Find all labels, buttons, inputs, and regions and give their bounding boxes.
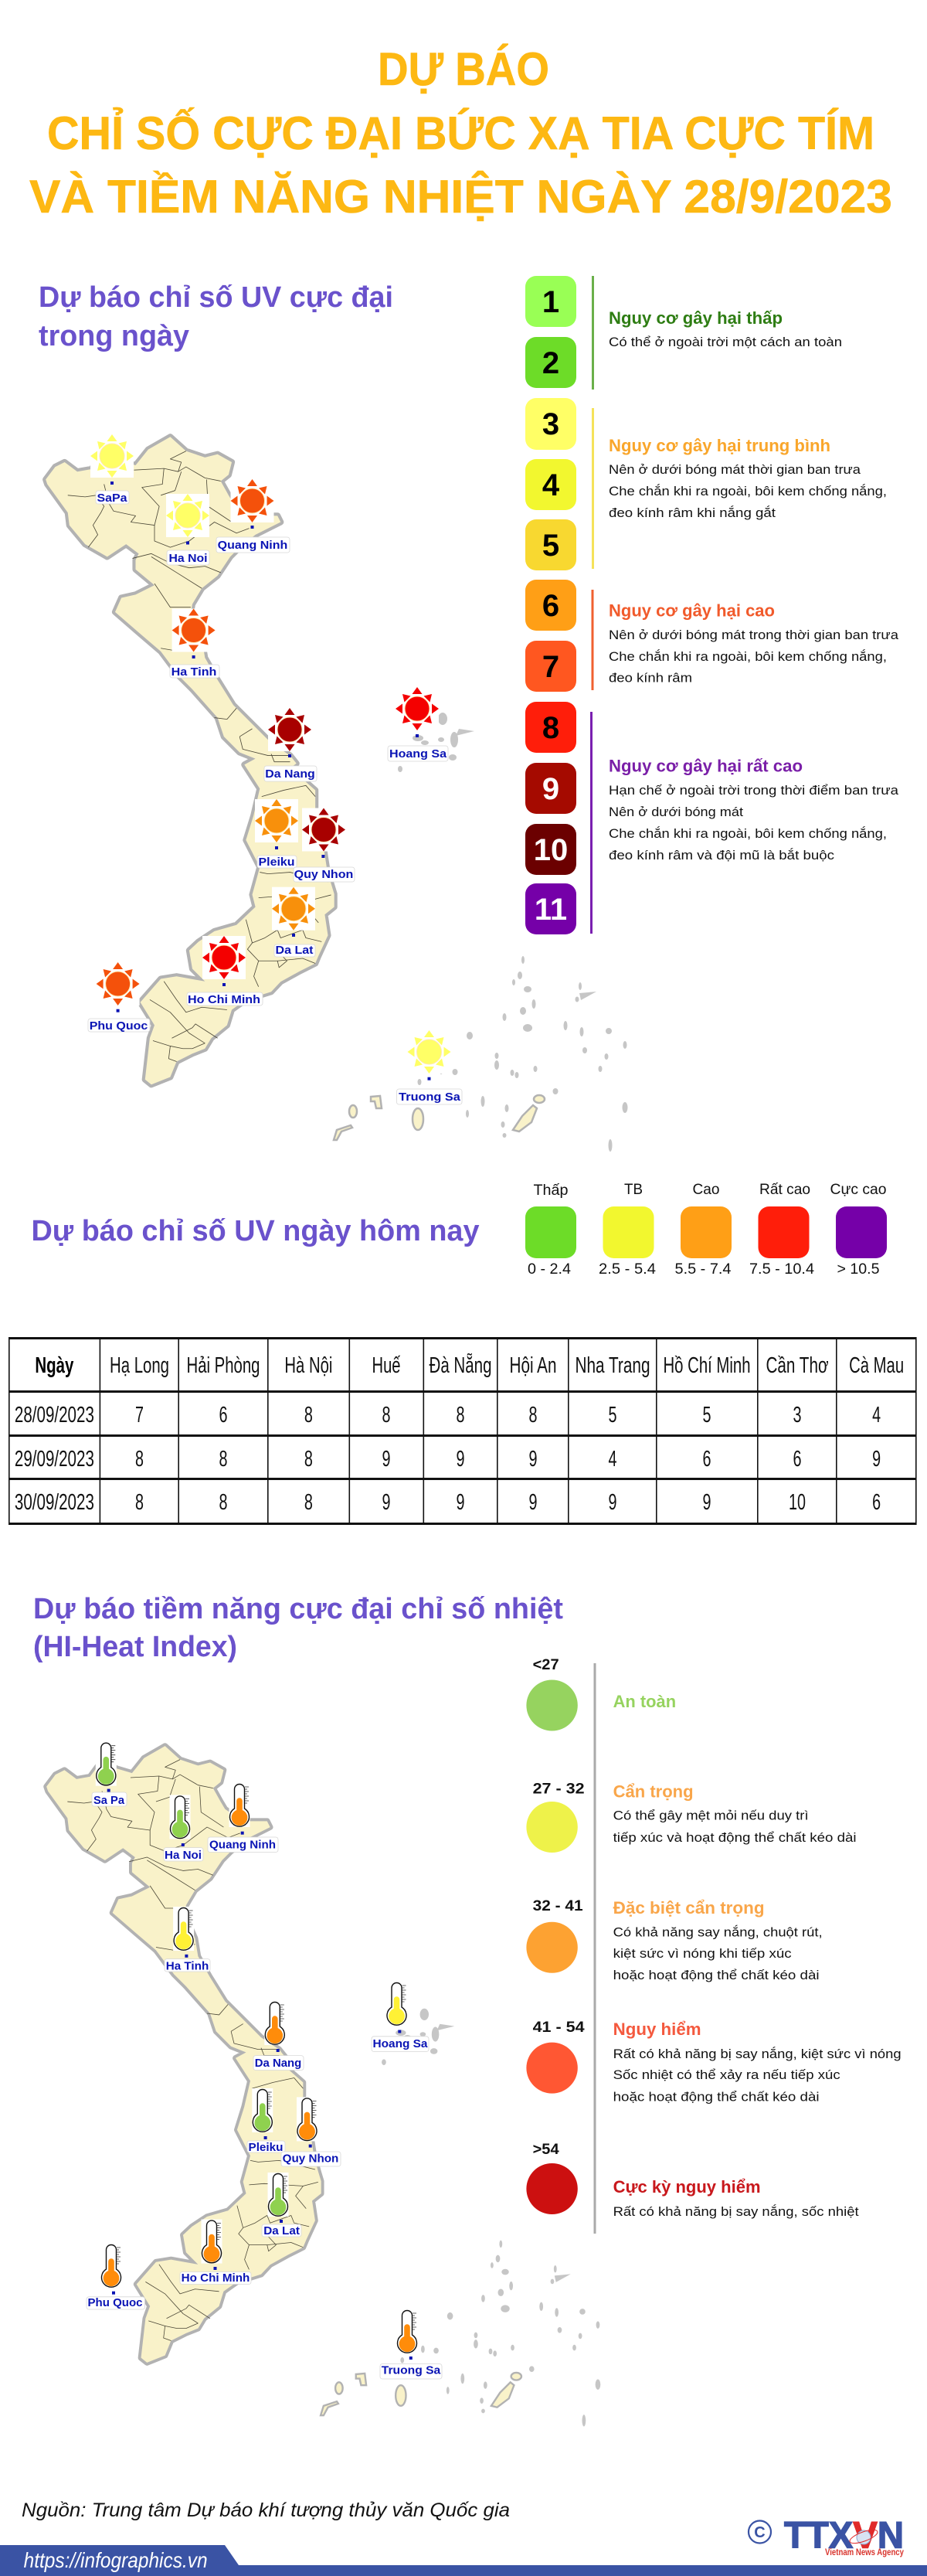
legend item: safe: An toàn <box>613 1692 676 1711</box>
table row: 30/09/2023 <box>15 1490 881 1515</box>
location labels: Hoang Sa <box>389 747 447 761</box>
legend item: safe: <27 <box>533 1657 559 1673</box>
location labels: Quy Nhon <box>294 868 353 881</box>
legend item: danger: Sốc nhiệt có thể xảy ra nếu tiếp xúc <box>613 2067 840 2082</box>
location labels: Ha Tinh <box>166 1960 209 1972</box>
panel: high risk advice: Che chắn khi ra ngoài, bôi kem chống nắng, <box>609 649 887 664</box>
table row: 29/09/2023: 9 <box>456 1447 465 1472</box>
heading: today's UV forecast: Dự báo chỉ số UV ngày hôm nay <box>31 1215 479 1247</box>
table: three-day UV forecast by city: Nha Trang <box>575 1353 650 1378</box>
location labels: Pleiku <box>258 856 295 869</box>
location labels: Quy Nhon <box>283 2152 338 2166</box>
table row: 30/09/2023: 6 <box>872 1490 881 1515</box>
table row: 29/09/2023: 8 <box>219 1447 227 1472</box>
table row: 29/09/2023: 6 <box>793 1447 802 1472</box>
legend item: extreme danger: >54 <box>533 2142 559 2158</box>
source note: Nguồn: Trung tâm Dự báo khí tượng thủy văn Quốc gia <box>22 2499 510 2521</box>
table: three-day UV forecast by city <box>8 1337 917 1525</box>
location labels: Hoang Sa <box>372 2037 428 2050</box>
legend item: extreme caution: Đặc biệt cẩn trọng <box>613 1898 765 1918</box>
table row: 28/09/2023: 7 <box>135 1403 144 1428</box>
panel: high risk advice: Nên ở dưới bóng mát trong thời gian ban trưa <box>609 628 899 642</box>
table row: 28/09/2023: 5 <box>703 1403 711 1428</box>
heading: daily UV max forecast: trong ngày <box>39 320 189 352</box>
table: three-day UV forecast by city: Hồ Chí Minh <box>663 1353 751 1378</box>
panel: UV scale boxes: 11 <box>535 893 567 927</box>
footer bar with website <box>0 2545 927 2576</box>
table row: 29/09/2023: 4 <box>609 1447 616 1472</box>
location labels: Da Lat <box>275 944 314 957</box>
icon: sun markers <box>90 434 451 1074</box>
legend: UV ranges: Rất cao <box>759 1182 810 1198</box>
map: UV forecast by location <box>46 434 627 1152</box>
table row: 28/09/2023: 28/09/2023 <box>15 1403 94 1428</box>
legend: UV ranges: Cực cao <box>830 1182 887 1198</box>
legend item: danger: Nguy hiểm <box>613 2020 701 2039</box>
panel: UV scale boxes <box>525 276 576 934</box>
title: VÀ TIỀM NĂNG NHIỆT NGÀY 28/9/2023 <box>29 171 892 223</box>
table row: 28/09/2023: 5 <box>609 1403 616 1428</box>
location labels: Ho Chi Minh <box>188 993 260 1006</box>
panel: moderate risk advice: Nguy cơ gây hại trung bình <box>609 436 830 455</box>
legend item: caution: tiếp xúc và hoạt động thể chất kéo dài <box>613 1830 857 1845</box>
table row: 28/09/2023: 6 <box>219 1403 227 1428</box>
heading: heat index forecast: (HI-Heat Index) <box>33 1631 237 1663</box>
panel: UV scale boxes: 5 <box>542 529 559 563</box>
legend: UV ranges: 2.5 - 5.4 <box>599 1261 656 1278</box>
table row: 28/09/2023: 3 <box>793 1403 802 1428</box>
location labels: Ha Noi <box>165 1849 202 1862</box>
panel: very high risk advice: Hạn chế ở ngoài trời trong thời điểm ban trưa <box>609 783 899 798</box>
logo: TTXVN: TTXVN <box>784 2515 904 2557</box>
legend item: extreme danger: Cực kỳ nguy hiểm <box>613 2177 761 2197</box>
footer bar with website: https://infographics.vn <box>24 2548 208 2572</box>
legend item: danger: Rất có khả năng bị say nắng, kiệt sức vì nóng <box>613 2047 902 2061</box>
panel: UV scale boxes: 4 <box>542 468 560 502</box>
table row: 29/09/2023: 29/09/2023 <box>15 1447 94 1472</box>
table row: 30/09/2023: 9 <box>609 1490 616 1515</box>
panel: UV scale boxes: 1 <box>542 285 559 319</box>
location labels <box>88 482 462 1104</box>
title: DỰ BÁO <box>378 43 549 95</box>
legend item: extreme caution: hoặc hoạt động thể chất kéo dài <box>613 1968 820 1982</box>
location labels: Truong Sa <box>399 1091 461 1104</box>
table row: 29/09/2023: 8 <box>135 1447 144 1472</box>
table row: 30/09/2023: 30/09/2023 <box>15 1490 94 1515</box>
legend item: extreme caution <box>526 1898 823 1982</box>
table: three-day UV forecast by city: Huế <box>372 1353 400 1378</box>
table row: 30/09/2023: 8 <box>304 1490 313 1515</box>
panel: very high risk advice: đeo kính râm và đội mũ là bắt buộc <box>609 848 835 863</box>
panel: moderate risk advice: Che chắn khi ra ngoài, bôi kem chống nắng, <box>609 484 887 499</box>
heading: daily UV max forecast <box>39 281 393 352</box>
table row: 28/09/2023: 8 <box>382 1403 391 1428</box>
panel: UV scale boxes: 7 <box>542 650 559 684</box>
logo: TTXVN: Vietnam News Agency <box>825 2548 905 2557</box>
location labels: Ha Noi <box>168 552 207 565</box>
table row: 29/09/2023: 9 <box>382 1447 391 1472</box>
heading: heat index forecast: Dự báo tiềm năng cực đại chỉ số nhiệt <box>33 1593 563 1625</box>
table row: 30/09/2023: 9 <box>703 1490 711 1515</box>
panel: high risk advice <box>592 590 899 690</box>
location labels: Ha Tinh <box>171 665 216 679</box>
panel: UV scale boxes: 9 <box>542 772 559 806</box>
legend item: extreme caution: 32 - 41 <box>533 1898 583 1914</box>
table: three-day UV forecast by city: Đà Nẵng <box>430 1353 491 1378</box>
legend: UV ranges: > 10.5 <box>837 1261 879 1278</box>
table: three-day UV forecast by city: Cà Mau <box>849 1353 904 1378</box>
panel: low risk advice <box>592 276 842 390</box>
location labels: Truong Sa <box>382 2363 441 2377</box>
legend item: caution <box>526 1781 857 1853</box>
table row: 29/09/2023: 8 <box>304 1447 313 1472</box>
legend: UV ranges: 0 - 2.4 <box>528 1261 571 1278</box>
table row: 30/09/2023: 10 <box>789 1490 806 1515</box>
panel: UV scale boxes: 3 <box>542 407 559 441</box>
panel: UV scale boxes: 8 <box>542 711 559 745</box>
legend item: extreme caution: kiệt sức vì nóng khi tiếp xúc <box>613 1946 792 1961</box>
legend item: extreme danger: Rất có khả năng bị say nắng, sốc nhiệt <box>613 2204 859 2219</box>
location labels: SaPa <box>97 492 127 505</box>
table row: 28/09/2023: 8 <box>456 1403 465 1428</box>
legend item: safe <box>526 1657 676 1731</box>
location labels: Da Lat <box>263 2224 300 2237</box>
legend: UV ranges: Thấp <box>533 1183 569 1199</box>
table: three-day UV forecast by city: Ngày <box>35 1353 73 1378</box>
legend item: caution: 27 - 32 <box>533 1781 585 1798</box>
title: CHỈ SỐ CỰC ĐẠI BỨC XẠ TIA CỰC TÍM <box>47 107 874 159</box>
location labels: Da Nang <box>265 767 315 781</box>
heading: heat index forecast <box>33 1593 563 1663</box>
legend item: extreme caution: Có khả năng say nắng, chuột rút, <box>613 1925 823 1940</box>
table row: 28/09/2023: 8 <box>304 1403 313 1428</box>
location labels: Quang Ninh <box>218 539 287 552</box>
location labels <box>87 1789 442 2379</box>
legend: UV ranges <box>525 1182 887 1278</box>
location labels: Sa Pa <box>93 1794 125 1807</box>
panel: high risk advice: Nguy cơ gây hại cao <box>609 601 775 620</box>
location labels: Phu Quoc <box>88 2296 142 2309</box>
panel: moderate risk advice <box>592 408 887 569</box>
legend: UV ranges: 5.5 - 7.4 <box>675 1261 732 1278</box>
panel: very high risk advice: Nguy cơ gây hại rất cao <box>609 756 803 776</box>
table: three-day UV forecast by city: Hạ Long <box>110 1353 169 1378</box>
panel: very high risk advice <box>590 712 899 934</box>
legend item: caution: Cẩn trọng <box>613 1782 694 1802</box>
table row: 30/09/2023: 9 <box>456 1490 465 1515</box>
table row: 30/09/2023: 8 <box>135 1490 144 1515</box>
heading: daily UV max forecast: Dự báo chỉ số UV cực đại <box>39 281 393 314</box>
panel: UV scale boxes: 6 <box>542 589 559 623</box>
table row: 29/09/2023: 9 <box>872 1447 881 1472</box>
table: three-day UV forecast by city: Cần Thơ <box>766 1353 828 1378</box>
legend item: danger: hoặc hoạt động thể chất kéo dài <box>613 2090 820 2104</box>
panel: UV scale boxes: 10 <box>534 833 568 867</box>
table: three-day UV forecast by city: Hải Phòng <box>187 1353 260 1378</box>
table: three-day UV forecast by city: Hội An <box>510 1353 556 1378</box>
table row: 29/09/2023: 6 <box>703 1447 711 1472</box>
icon: thermometer markers <box>96 1742 418 2353</box>
table row: 30/09/2023: 9 <box>528 1490 538 1515</box>
panel: moderate risk advice: Nên ở dưới bóng mát thời gian ban trưa <box>609 462 861 477</box>
panel: heat index legend <box>526 1657 902 2234</box>
legend: UV ranges: Cao <box>692 1182 720 1198</box>
panel: low risk advice: Có thể ở ngoài trời một cách an toàn <box>609 335 842 349</box>
table: three-day UV forecast by city: Hà Nội <box>284 1353 332 1378</box>
logo: TTXVN: C <box>754 2524 766 2541</box>
location labels: Ho Chi Minh <box>182 2271 250 2285</box>
table row: 28/09/2023: 8 <box>528 1403 538 1428</box>
table row: 29/09/2023 <box>15 1447 881 1472</box>
panel: very high risk advice: Nên ở dưới bóng mát <box>609 805 743 819</box>
panel: high risk advice: đeo kính râm <box>609 671 692 685</box>
location labels: Pleiku <box>249 2141 283 2154</box>
location labels: Phu Quoc <box>90 1019 148 1033</box>
table row: 30/09/2023: 9 <box>382 1490 391 1515</box>
legend item: danger: 41 - 54 <box>533 2020 585 2036</box>
legend item: danger <box>526 2020 902 2104</box>
legend item: extreme danger <box>526 2142 859 2219</box>
panel: very high risk advice: Che chắn khi ra ngoài, bôi kem chống nắng, <box>609 826 887 841</box>
title <box>29 43 892 223</box>
panel: low risk advice: Nguy cơ gây hại thấp <box>609 308 783 328</box>
location labels: Da Nang <box>255 2057 301 2070</box>
table row: 28/09/2023 <box>15 1403 881 1428</box>
legend: UV ranges: 7.5 - 10.4 <box>749 1261 814 1278</box>
table row: 28/09/2023: 4 <box>872 1403 881 1428</box>
legend item: caution: Có thể gây mệt mỏi nếu duy trì <box>613 1809 809 1823</box>
table row: 30/09/2023: 8 <box>219 1490 227 1515</box>
location labels: Quang Ninh <box>209 1838 276 1852</box>
map: heat index forecast by location <box>46 1742 600 2426</box>
panel: moderate risk advice: đeo kính râm khi nắng gắt <box>609 505 776 520</box>
legend: UV ranges: TB <box>624 1182 643 1198</box>
table row: 29/09/2023: 9 <box>528 1447 538 1472</box>
panel: UV scale boxes: 2 <box>542 346 559 380</box>
